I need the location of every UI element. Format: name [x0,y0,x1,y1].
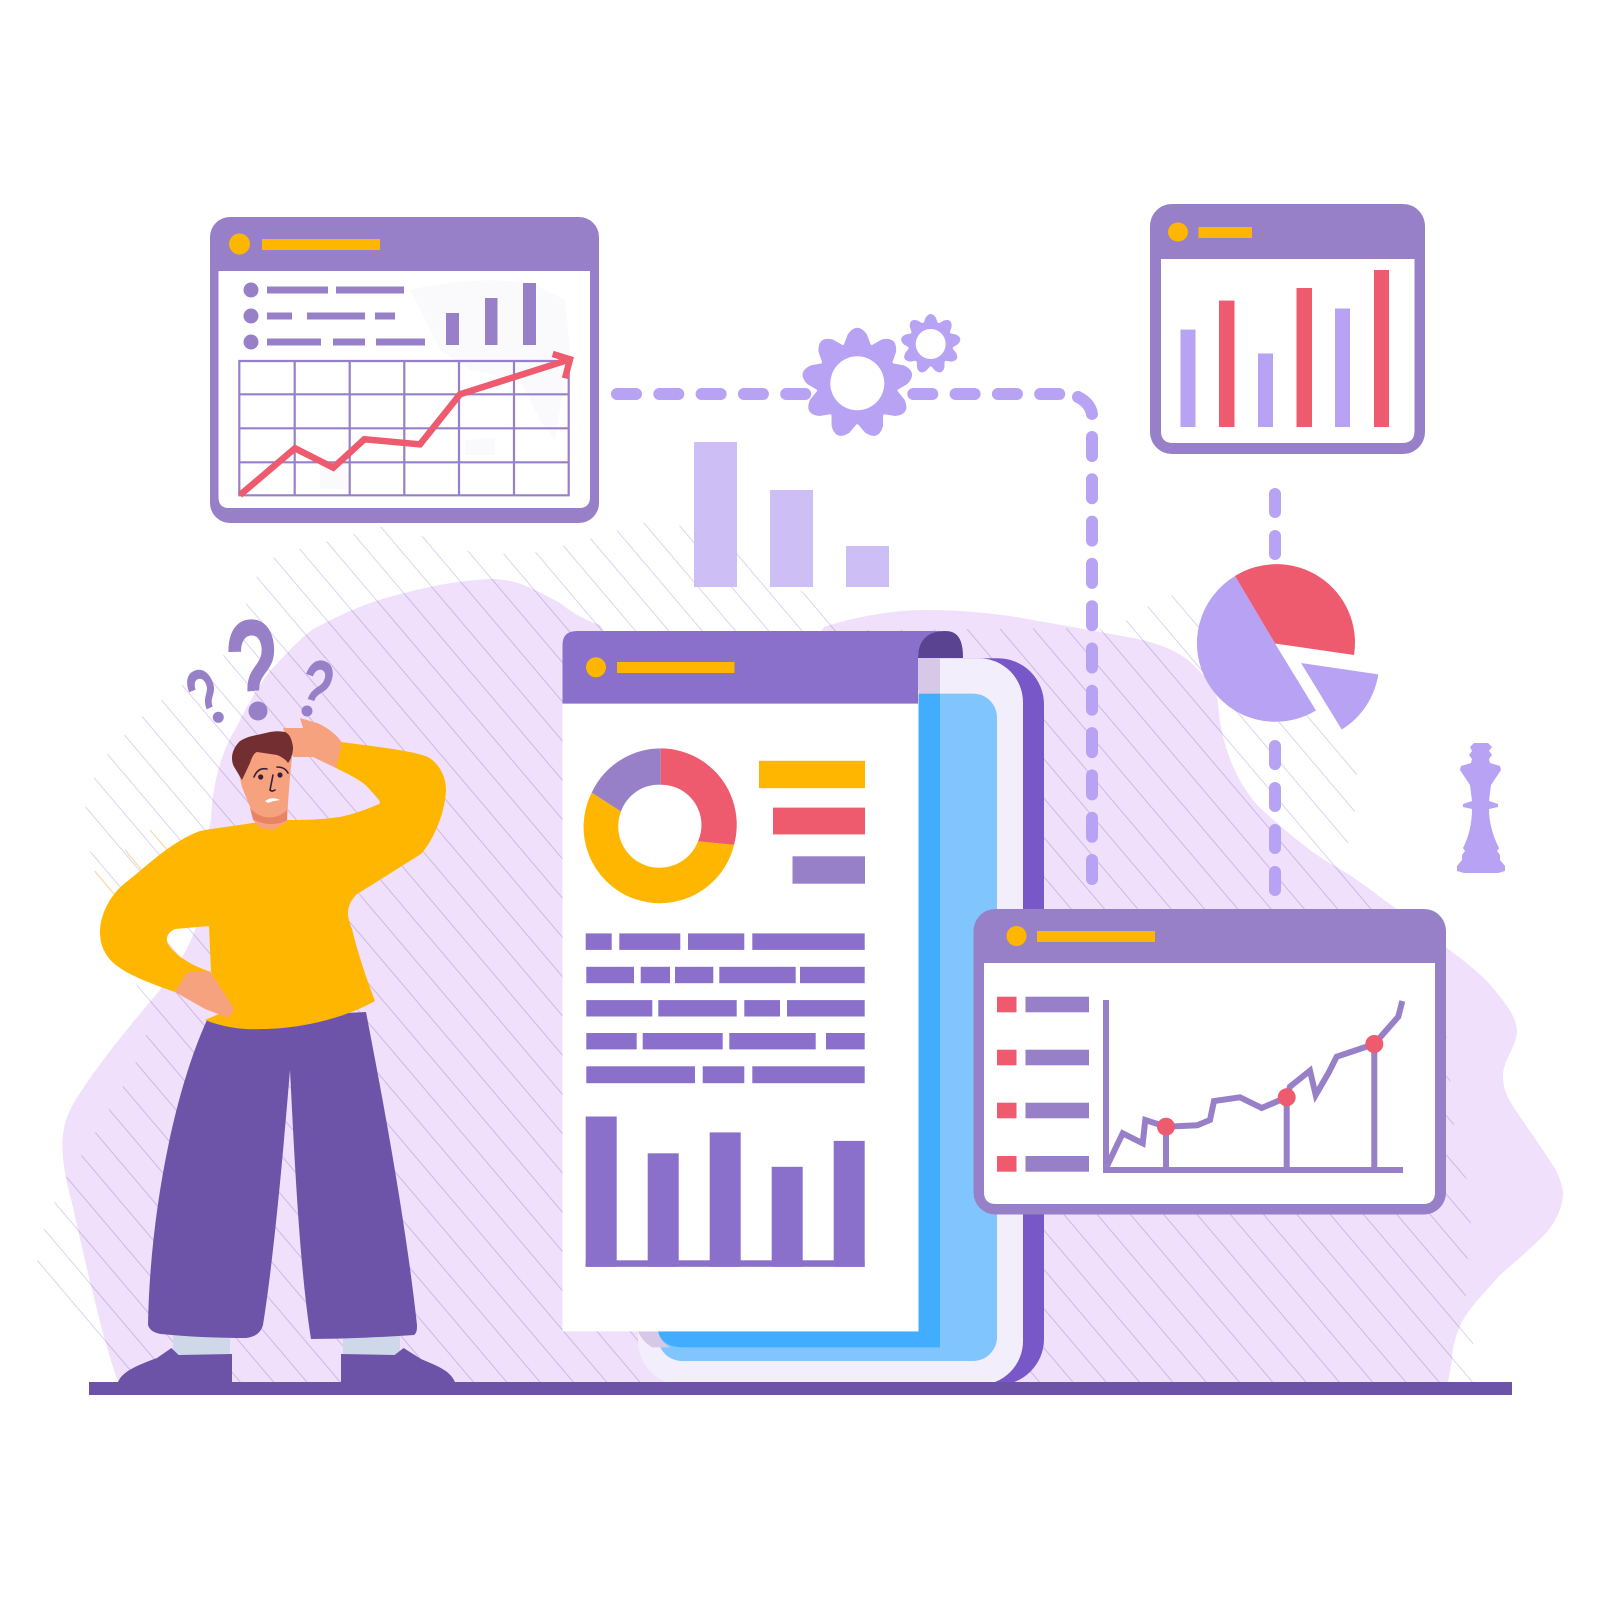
icon: small gear [900,314,962,375]
legend bars [759,761,865,884]
illustration: confused analyst with dashboards [37,204,1563,1395]
question marks: ? [219,587,288,755]
frame shadow [638,658,940,1347]
question marks: ? [287,640,344,739]
neck shadow [250,808,287,824]
question marks [187,619,333,723]
eyes [258,772,283,780]
shoes [118,1348,455,1382]
dashed connector: chart to pie to window [1269,494,1281,890]
icon: chess king [1457,743,1505,873]
hair [232,731,293,780]
table grid [239,361,569,495]
trousers [148,1012,417,1339]
device back [700,658,1044,1385]
list lines [244,282,536,350]
socks [173,1335,400,1356]
page header [562,631,945,704]
donut chart [584,748,737,903]
panel: stock line window [974,909,1446,1214]
legend rows [997,997,1089,1172]
bar chart [586,1116,865,1267]
ground line [89,1382,1512,1395]
mouth [265,798,280,803]
hand on hip [175,972,234,1018]
sweater [100,742,446,1029]
fold [918,631,963,658]
person: confused analyst [100,718,455,1382]
light bar chart behind document [694,442,889,587]
panel: bar chart window [1150,204,1425,454]
line chart [1106,1000,1403,1170]
document device [562,631,1044,1385]
face and neck [238,750,292,830]
facial features [254,767,288,791]
background blob [62,579,1563,1382]
screen [658,694,997,1361]
icon: pie chart [1197,564,1378,730]
question marks: ? [173,650,240,746]
trend arrow [240,354,570,495]
text placeholder rows [586,933,865,1083]
device frame [638,658,1023,1385]
panel: line chart window [210,217,599,523]
hand on head [283,718,342,768]
screen shadow [658,694,940,1347]
page [562,690,918,1331]
dashed connector: gears to right [617,394,1092,880]
icon: large gear [800,328,914,440]
background diagonal hatching [37,522,1474,1382]
